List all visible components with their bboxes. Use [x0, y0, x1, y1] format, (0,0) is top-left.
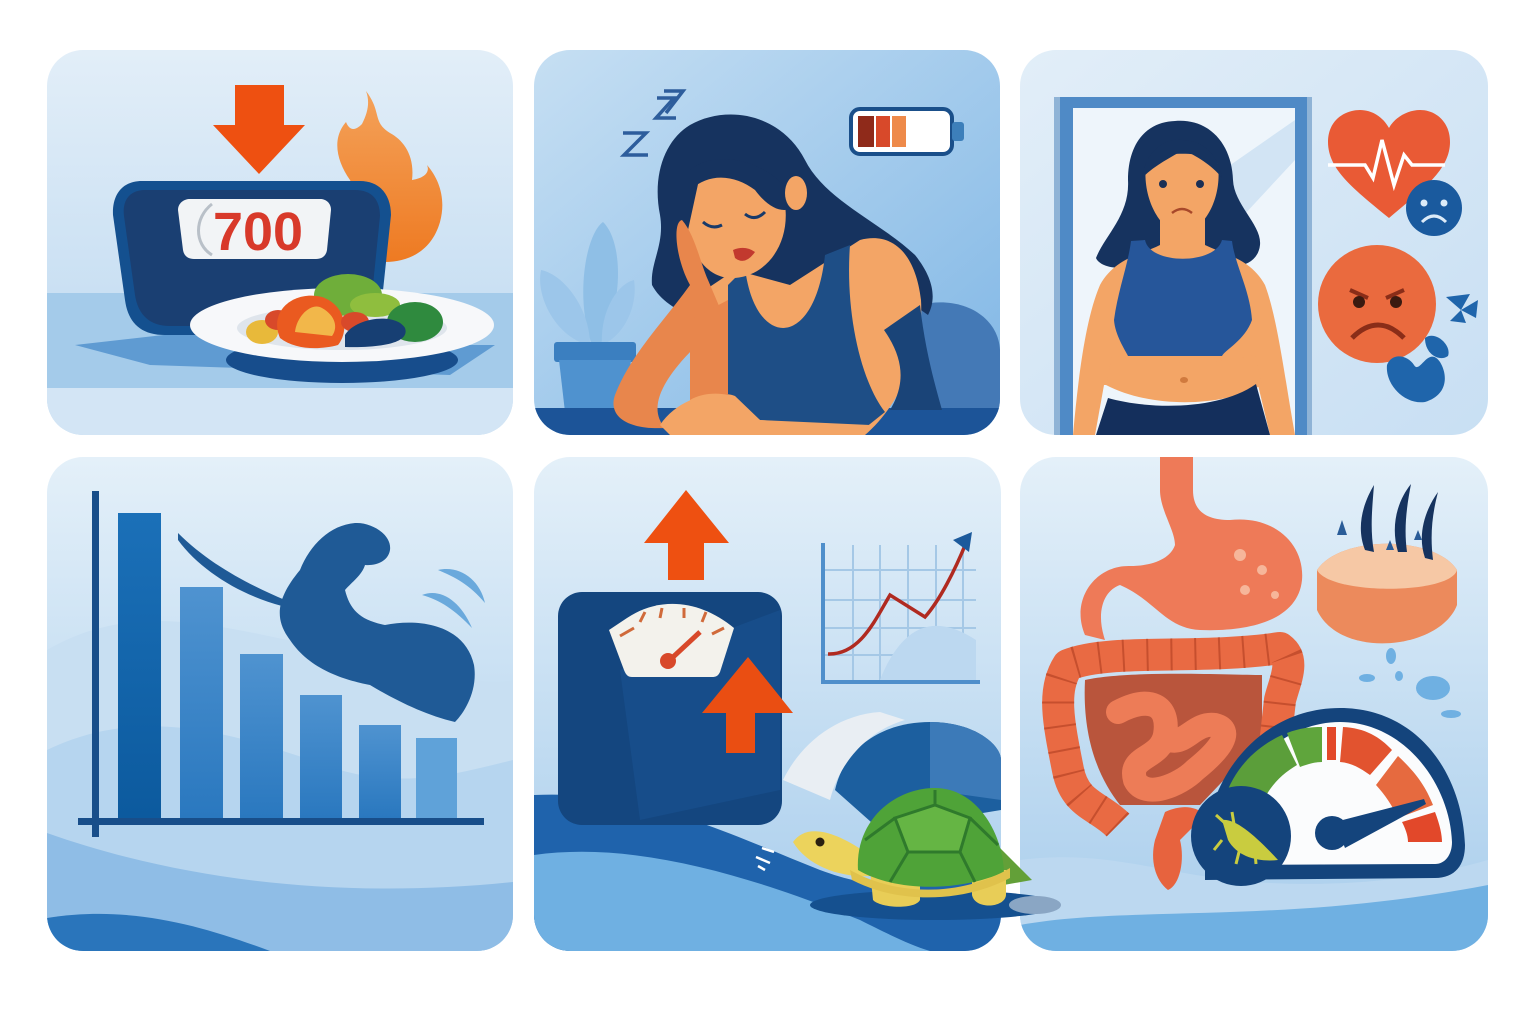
icon: motion swooshes	[422, 569, 485, 628]
icon: down arrow	[213, 85, 305, 174]
icon: heart with pulse	[1328, 110, 1450, 218]
icon: scale showing 700: 700	[213, 202, 303, 262]
icon: potted plant	[540, 222, 636, 412]
figure: woman in mirror	[1073, 121, 1295, 435]
icon: sad face blue	[1406, 180, 1462, 236]
icon: bathroom scale with dial	[558, 592, 782, 825]
panel: low calorie diet	[47, 50, 513, 435]
icon: water droplets	[1359, 648, 1461, 718]
icon: zzz sleep	[623, 91, 683, 155]
mirror	[1054, 97, 1312, 443]
figure: tired woman	[613, 115, 942, 435]
panel: fatigue	[534, 50, 1000, 435]
icon: bacteria badge	[1191, 786, 1291, 886]
chair	[920, 302, 1000, 412]
icon: angry sad face	[1318, 245, 1436, 363]
icon: flame	[337, 91, 442, 262]
panel: muscle loss	[47, 457, 513, 951]
line chart rising	[823, 532, 980, 682]
icon: turtle	[756, 788, 1061, 920]
icon: scale showing 700	[113, 181, 391, 335]
bar chart	[78, 491, 484, 837]
panel: body image	[1020, 50, 1488, 443]
icon: large up arrow	[644, 490, 729, 580]
icon: speed gauge	[1205, 708, 1465, 880]
icon: shrinking muscle arm	[178, 523, 475, 722]
panel: weight rebound	[534, 457, 1001, 951]
icon: plate of food	[190, 274, 494, 383]
icon: shell behind	[835, 722, 1001, 830]
icon: intestines	[1058, 648, 1288, 890]
icon: pinwheel and blobs	[1387, 294, 1478, 402]
icon: second up arrow	[702, 657, 793, 753]
icon: hair follicles on skin	[1317, 484, 1457, 643]
panel: digestive system	[1020, 457, 1488, 951]
desk	[534, 408, 1000, 435]
icon: low battery	[851, 109, 964, 154]
icon: esophagus and stomach	[1081, 457, 1302, 640]
